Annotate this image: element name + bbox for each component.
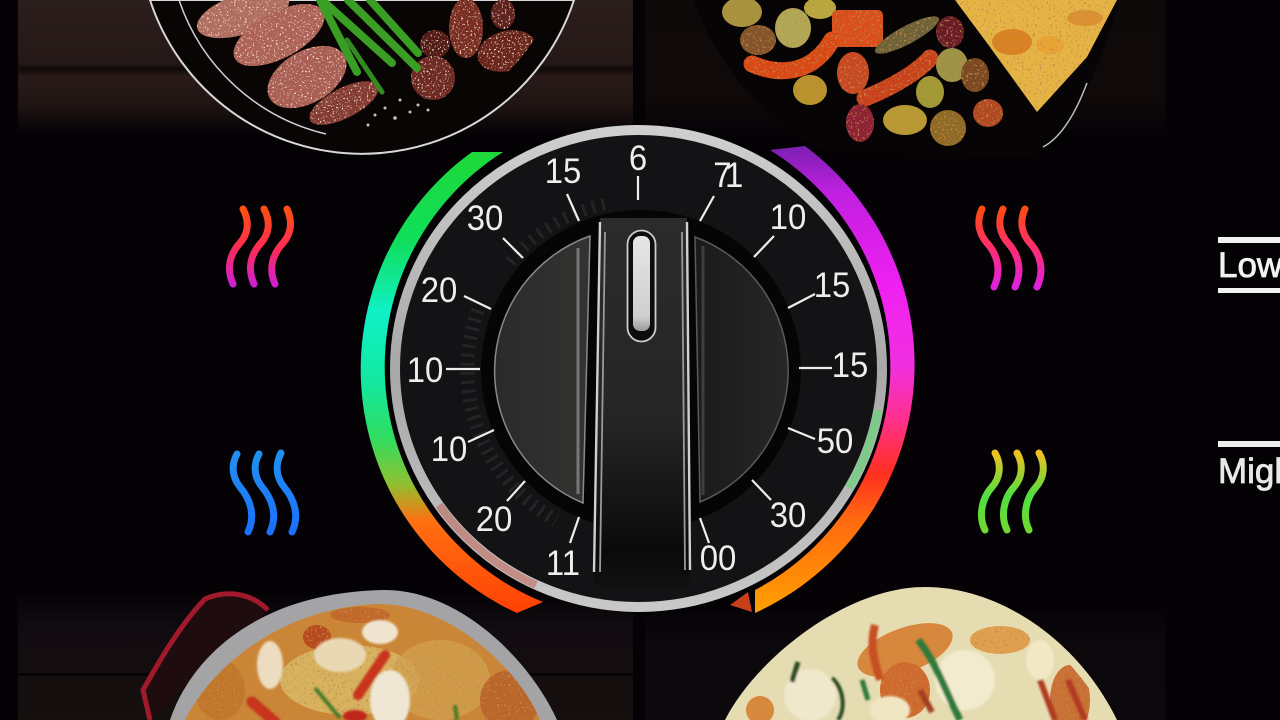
faint engraved minute marks bbox=[467, 203, 610, 520]
grip edge highlights bbox=[594, 222, 690, 572]
heat squiggles: pink, upper right bbox=[979, 209, 1041, 287]
dial numbers: 71 bbox=[713, 156, 742, 195]
label: Low bbox=[1218, 237, 1280, 293]
dish rim bbox=[170, 590, 557, 720]
dial numbers: 20 bbox=[476, 500, 512, 539]
pizza toppings bbox=[746, 612, 1090, 720]
dial numbers: 10 bbox=[431, 430, 467, 469]
vegetables bbox=[722, 0, 1003, 146]
food: steak pan bbox=[150, 0, 574, 154]
dial numbers: 15 bbox=[832, 346, 868, 385]
dial numbers: 15 bbox=[545, 152, 581, 191]
food: roasted vegetable skillet bbox=[693, 0, 1120, 156]
dial numbers: 30 bbox=[467, 199, 503, 238]
baked topping bbox=[170, 600, 550, 720]
knob centre grip bbox=[593, 218, 690, 588]
icon: red handle bbox=[143, 594, 268, 720]
dial numbers bbox=[407, 139, 868, 583]
dial numbers: 00 bbox=[700, 539, 736, 578]
dial numbers: 6 bbox=[629, 139, 647, 178]
indicator pill bbox=[628, 230, 656, 342]
dial numbers: 20 bbox=[421, 271, 457, 310]
green beans bbox=[320, 0, 418, 92]
dial bbox=[395, 130, 882, 607]
heat squiggles: red, upper left bbox=[229, 209, 290, 284]
dial numbers: 11 bbox=[546, 544, 580, 583]
pan seasoning speckles bbox=[366, 98, 430, 126]
rainbow arc: left bbox=[361, 152, 543, 613]
knob left half bbox=[495, 236, 590, 503]
rainbow arc: right bbox=[755, 146, 915, 613]
tick marks bbox=[446, 176, 832, 543]
dial numbers: 15 bbox=[814, 266, 850, 305]
ring colour reflections bbox=[439, 410, 878, 585]
dial numbers: 10 bbox=[407, 351, 443, 390]
dark recess around knob bbox=[481, 210, 801, 530]
heat squiggles: blue, lower left bbox=[233, 453, 296, 532]
steak slices bbox=[191, 0, 541, 134]
heat squiggles: green, lower right bbox=[981, 453, 1043, 530]
dial face with silver ring bbox=[395, 130, 882, 607]
small red wedge at dial base bbox=[730, 592, 752, 612]
food: baked dish with handle bbox=[143, 590, 557, 720]
corn bread wedge bbox=[955, 0, 1117, 112]
food: pizza bbox=[725, 587, 1117, 720]
dial numbers: 10 bbox=[770, 198, 806, 237]
dial numbers: 50 bbox=[817, 422, 853, 461]
knob right half bbox=[695, 237, 788, 502]
dial numbers: 30 bbox=[770, 496, 806, 535]
